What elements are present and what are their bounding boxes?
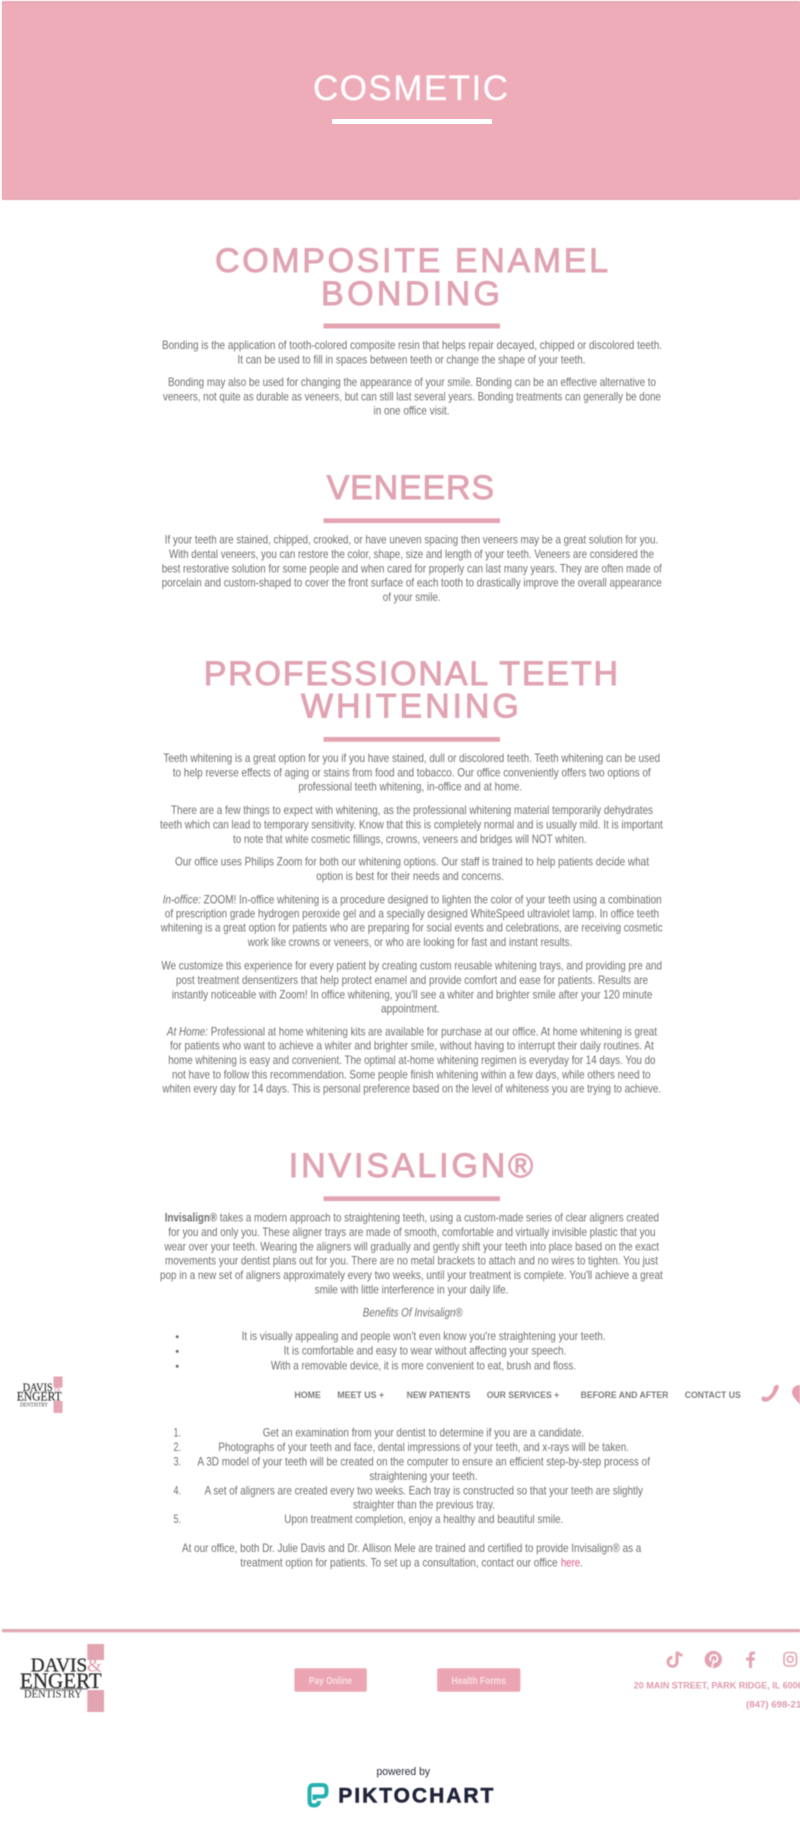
numbered list: invisalign steps: A 3D model of your teeth will be created on the computer to ensure an efficient step-by-step process of: [197, 1455, 651, 1468]
text block: in-office whitening: work like crowns or veneers, or who are looking for fast and instant results.: [247, 936, 572, 949]
nav links: NEW PATIENTS: [407, 1390, 470, 1400]
text block: bonding description: Bonding is the application of tooth-colored composite resin that helps repair decayed, chipped or discolored teeth.: [162, 339, 662, 352]
icon: tiktok: [666, 1651, 683, 1668]
heading: composite enamel bonding: BONDING: [321, 275, 500, 313]
text block: whitening introduction: There are a few things to expect with whitening, as the professional whitening material temporarily dehydrates: [171, 804, 653, 817]
text block: consultation note: here.: [561, 1556, 583, 1569]
text block: whitening introduction: to note that white cosmetic fillings, crowns, veneers and bridges will NOT whiten.: [233, 833, 587, 846]
text block: veneers description: best restorative solution for some people and when cared for properly can last many years. They are often made of: [162, 562, 662, 575]
text block: consultation note: treatment option for patients. To set up a consultation, contact our office: [240, 1556, 558, 1569]
footer: [2, 1629, 800, 1712]
logo: footer: &: [87, 1656, 102, 1676]
numbered list: invisalign steps: A set of aligners are created every two weeks. Each tray is constructed so that your teeth are slightly: [205, 1484, 643, 1497]
text block: in-office whitening: whitening is a great option for patients who are preparing for social events and celebrations, are receiving cosmetic: [160, 922, 663, 935]
text block: invisalign description: for you and only you. These aligner trays are made of smooth, comfortable and virtually invisible plastic that you: [168, 1226, 655, 1239]
text block: whitening introduction: professional teeth whitening, in-office and at home.: [298, 781, 522, 794]
bullet list: benefits: It is visually appealing and people won't even know you're straightening your teeth.: [242, 1330, 606, 1343]
text block: veneers description: With dental veneers, you can restore the color, shape, size and length of your teeth. Veneers are considered the: [169, 548, 654, 561]
logo: nav: [17, 1376, 62, 1413]
text block: veneers description: porcelain and custom-shaped to cover the front surface of each tooth to drastically improve the overall appearance: [162, 577, 662, 590]
powered by: powered by: [376, 1766, 430, 1778]
section: invisalign: [160, 1147, 663, 1373]
section: professional teeth whitening: [160, 655, 663, 1096]
piktochart branding: [310, 1766, 493, 1807]
text block: in-office whitening: appointment.: [381, 1003, 440, 1016]
section: veneers: [162, 469, 662, 604]
text block: invisalign description: wear over your teeth. Wearing the aligners will gradually and gently shift your teeth into place based on the exact: [164, 1240, 660, 1253]
text block: veneers description: [162, 534, 662, 604]
heading: professional teeth whitening: PROFESSIONAL TEETH: [204, 655, 618, 693]
icon: map pin: [792, 1385, 800, 1404]
icon: pinterest: [705, 1651, 722, 1668]
icon: facebook: [746, 1652, 755, 1668]
logo: nav: DENTISTRY: [20, 1402, 49, 1408]
text block: invisalign description: pop in a new set of aligners approximately every two weeks, until your treatment is complete. You'll achieve a great: [160, 1269, 663, 1282]
nav links: [294, 1390, 741, 1400]
nav links: HOME: [294, 1390, 321, 1400]
heading: invisalign: INVISALIGN®: [289, 1147, 533, 1185]
text block: whitening introduction: teeth which can lead to temporary sensitivity. Know that this is completely normal and is usually mild. It is important: [160, 819, 663, 832]
text block: bonding description: in one office visit.: [374, 405, 450, 418]
logo: nav: ENGERT: [17, 1390, 62, 1404]
text block: at-home whitening: not have to follow this recommendation. Some people finish whitening within a few days, while others need to: [172, 1068, 651, 1081]
text block: invisalign description: [160, 1212, 663, 1296]
numbered list: invisalign steps: 4.: [174, 1484, 181, 1497]
button: pay online: [294, 1668, 367, 1692]
heading: professional teeth whitening: [204, 655, 618, 726]
text block: veneers description: of your smile.: [383, 591, 441, 604]
nav links: CONTACT US: [685, 1390, 741, 1400]
text block: at-home whitening: for patients who want to achieve a whiter and brighter smile, without having to interrupt their daily routines. At: [170, 1040, 654, 1053]
heading: composite enamel bonding: COMPOSITE ENAMEL: [215, 242, 608, 280]
button: health forms: Health Forms: [452, 1676, 506, 1687]
text block: consultation note: At our office, both Dr. Julie Davis and Dr. Allison Mele are trained and certified to provide Invisalign® as a: [182, 1542, 642, 1555]
text block: bonding description: It can be used to fill in spaces between teeth or change the shape of your teeth.: [238, 353, 586, 366]
heading: professional teeth whitening: WHITENING: [301, 688, 519, 726]
numbered list: invisalign steps: straightening your teeth.: [369, 1470, 478, 1483]
text block: whitening introduction: Teeth whitening is a great option for you if you have stained, dull or discolored teeth. Teeth whitening can be used: [163, 752, 660, 765]
text block: at-home whitening: At Home: Professional at home whitening kits are available for purchase at our office. At home whitening is great: [166, 1025, 658, 1038]
logo: footer: ENGERT: [20, 1668, 102, 1693]
header banner: [2, 1, 800, 200]
icon: instagram: [784, 1652, 796, 1666]
text block: bonding description: Bonding may also be used for changing the appearance of your smile. Bonding can be an effective alternative to: [168, 376, 656, 389]
numbered list: invisalign steps: Upon treatment completion, enjoy a healthy and beautiful smile.: [284, 1513, 563, 1526]
text block: in-office whitening: We customize this experience for every patient by creating custom reusable whitening trays, and providing pre and: [161, 960, 662, 973]
text block: whitening introduction: [160, 752, 663, 883]
numbered list: invisalign steps: [174, 1427, 651, 1526]
logo: footer: DENTISTRY: [24, 1688, 83, 1700]
navigation bar overlay: [17, 1376, 800, 1413]
bullet list: benefits: With a removable device, it is more convenient to eat, brush and floss.: [271, 1360, 576, 1373]
text block: veneers description: If your teeth are stained, chipped, crooked, or have uneven spacing then veneers may be a great solution for you.: [165, 534, 658, 547]
numbered list: invisalign steps: 3.: [174, 1455, 181, 1468]
nav links: OUR SERVICES +: [487, 1390, 559, 1400]
button: pay online: Pay Online: [309, 1676, 352, 1687]
text block: in-office whitening: [160, 893, 663, 1016]
text block: invisalign description: movements your dentist plans out for you. There are no metal brackets to attach and no wires to tighten. You just: [165, 1255, 659, 1268]
text block: bonding description: veneers, not quite as durable as veneers, but can still last several years. Bonding treatments can generally be done: [163, 390, 661, 403]
heading: composite enamel bonding: [215, 242, 608, 313]
text block: whitening introduction: Our office uses Philips Zoom for both our whitening options. Our staff is trained to help patients decide what: [175, 856, 650, 869]
piktochart wordmark: PIKTOCHART: [338, 1784, 493, 1807]
text block: in-office whitening: instantly noticeable with Zoom! In office whitening, you'll see a whiter and brighter smile after your 120 minute: [172, 988, 652, 1001]
text block: in-office whitening: In-office: ZOOM! In-office whitening is a procedure designed to lighten the color of your teeth using a combination: [163, 893, 662, 906]
text block: whitening introduction: to help reverse effects of aging or stains from food and tobacco. Our office conveniently offers two options of: [173, 766, 651, 779]
text block: at-home whitening: home whitening is easy and convenient. The optimal at-home whitening regimen is everyday for 14 days. You do: [168, 1054, 655, 1067]
text block: in-office whitening: of prescription grade hydrogen peroxide gel and a specially designed WhiteSpeed ultraviolet lamp. In office teeth: [165, 907, 659, 920]
numbered list: invisalign steps: 1.: [174, 1427, 181, 1440]
logo: nav: &: [54, 1383, 61, 1393]
logo: footer: DAVIS: [31, 1654, 87, 1676]
numbered list: invisalign steps: Photographs of your teeth and face, dental impressions of your teeth, and x-rays will be taken.: [218, 1441, 629, 1454]
nav links: BEFORE AND AFTER: [581, 1390, 669, 1400]
numbered list: invisalign steps: straighter than the previous tray.: [353, 1499, 495, 1512]
text block: in-office whitening: post treatment densentizers that help protect enamel and provide comfort and ease for patients. Results are: [176, 974, 648, 987]
text block: at-home whitening: [162, 1025, 661, 1096]
text block: invisalign description: Invisalign® takes a modern approach to straightening teeth, using a custom-made series of clear aligners created: [165, 1212, 659, 1225]
bullet list: benefits: [176, 1330, 606, 1373]
nav links: MEET US +: [337, 1390, 384, 1400]
numbered list: invisalign steps: Get an examination from your dentist to determine if you are a candidate.: [263, 1427, 584, 1440]
button: health forms: [437, 1668, 520, 1692]
numbered list: invisalign steps: 5.: [174, 1513, 181, 1526]
section: composite enamel bonding: [162, 242, 662, 418]
text block: invisalign description: smile with little interference in your daily life.: [315, 1283, 508, 1296]
text block: bonding description: [162, 339, 662, 418]
text block: at-home whitening: whiten every day for 14 days. This is personal preference based on the level of whiteness you are trying to achieve.: [162, 1083, 661, 1096]
icon: piktochart logo: [310, 1785, 326, 1806]
subheading: benefits of invisalign: Benefits Of Invisalign®: [363, 1306, 463, 1320]
text block: whitening introduction: option is best for their needs and concerns.: [316, 870, 504, 883]
bullet list: benefits: It is comfortable and easy to wear without affecting your speech.: [284, 1345, 566, 1358]
title: COSMETIC: [313, 69, 508, 108]
logo: footer: [20, 1644, 104, 1712]
heading: veneers: VENEERS: [327, 469, 494, 507]
icon: phone: [761, 1384, 779, 1402]
text block: consultation note: [182, 1542, 642, 1569]
numbered list: invisalign steps: 2.: [174, 1441, 181, 1454]
logo: nav: DAVIS: [23, 1380, 53, 1394]
